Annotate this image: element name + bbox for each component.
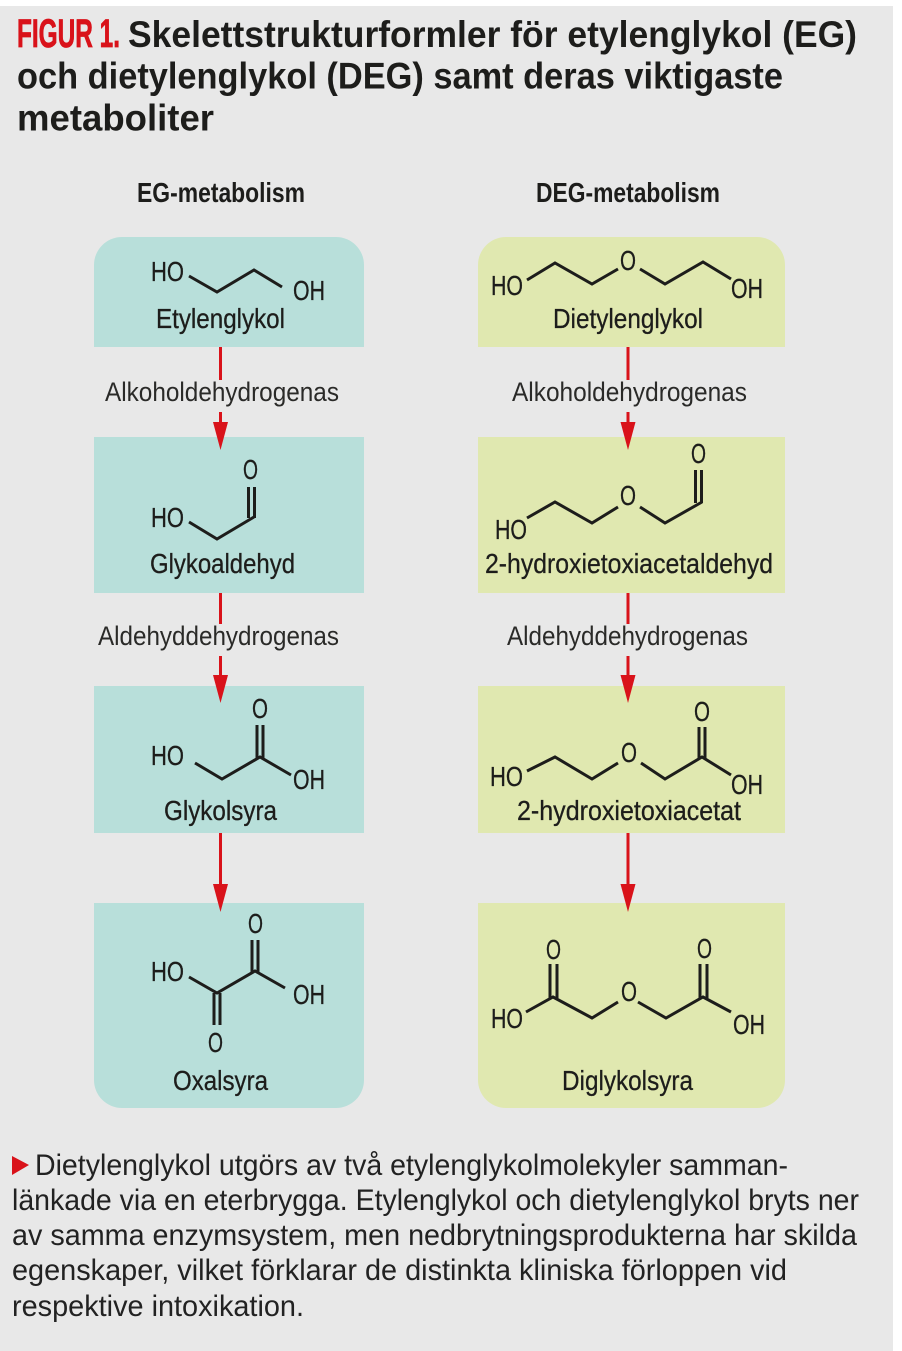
box: Glykoaldehyd: O <box>243 454 258 485</box>
box: Oxalsyra: OH <box>293 979 325 1010</box>
box: 2-hydroxietoxiacetaldehyd: 2-hydroxietoxiacetaldehyd <box>485 548 773 579</box>
box: Diglykolsyra: OH <box>733 1009 765 1040</box>
arrow: Alkoholdehydrogenas <box>105 347 339 450</box>
box: Glykolsyra <box>94 686 364 833</box>
box: 2-hydroxietoxiacetat: 2-hydroxietoxiacetat <box>517 795 741 826</box>
box: Oxalsyra: O <box>248 908 263 939</box>
box: Dietylenglykol <box>478 237 785 347</box>
arrow: Alkoholdehydrogenas <box>512 347 747 450</box>
arrow: Alkoholdehydrogenas: Alkoholdehydrogenas <box>105 377 339 407</box>
title <box>17 12 857 138</box>
box: 2-hydroxietoxiacetaldehyd: HO <box>495 514 527 545</box>
arrow: Alkoholdehydrogenas: Alkoholdehydrogenas <box>512 377 747 407</box>
box: Diglykolsyra <box>478 903 785 1108</box>
box: Diglykolsyra: O <box>546 934 561 965</box>
arrow: Aldehyddehydrogenas <box>507 593 748 703</box>
title: och dietylenglykol (DEG) samt deras viktigaste <box>17 56 783 96</box>
box: 2-hydroxietoxiacetaldehyd <box>478 437 785 593</box>
box: Oxalsyra <box>94 903 364 1108</box>
title: FIGUR 1. <box>17 12 120 56</box>
box: 2-hydroxietoxiacetat <box>478 686 785 833</box>
box: Diglykolsyra: HO <box>491 1003 523 1034</box>
caption: Dietylenglykol utgörs av två etylenglykolmolekyler samman- <box>35 1149 788 1182</box>
box: Etylenglykol <box>94 237 364 347</box>
arrow: Aldehyddehydrogenas <box>98 593 339 703</box>
box: Etylenglykol: HO <box>151 256 184 287</box>
box: Glykolsyra: HO <box>151 740 184 771</box>
box: 2-hydroxietoxiacetat: OH <box>731 769 763 800</box>
caption: länkade via en eterbrygga. Etylenglykol och dietylenglykol bryts ner <box>12 1184 859 1217</box>
column heading: EG-metabolism: EG-metabolism <box>137 177 305 208</box>
box: Glykolsyra: OH <box>293 764 325 795</box>
caption: egenskaper, vilket förklarar de distinkta kliniska förloppen vid <box>12 1254 787 1287</box>
box: 2-hydroxietoxiacetaldehyd: O <box>620 480 636 511</box>
arrow: Glykolsyra to Oxalsyra <box>213 833 228 912</box>
box: Dietylenglykol: HO <box>491 270 523 301</box>
box: Oxalsyra: Oxalsyra <box>173 1065 268 1096</box>
box: Dietylenglykol: OH <box>731 273 763 304</box>
box: Oxalsyra: HO <box>151 956 184 987</box>
arrow: Aldehyddehydrogenas: Aldehyddehydrogenas <box>507 621 748 651</box>
box: Dietylenglykol: Dietylenglykol <box>553 303 703 334</box>
box: Glykoaldehyd <box>94 437 364 593</box>
panel: DEG column <box>478 237 785 1108</box>
box: 2-hydroxietoxiacetaldehyd: O <box>691 438 706 469</box>
box: Etylenglykol: Etylenglykol <box>156 303 285 334</box>
caption: respektive intoxikation. <box>12 1290 304 1323</box>
icon: red triangle <box>12 1156 29 1175</box>
box: 2-hydroxietoxiacetat: HO <box>490 761 523 792</box>
box: Diglykolsyra: O <box>621 976 637 1007</box>
arrow: 2-hydroxietoxiacetat to Diglykolsyra <box>620 833 636 912</box>
caption <box>12 1149 859 1323</box>
box: Glykoaldehyd: HO <box>151 502 184 533</box>
box: Diglykolsyra: Diglykolsyra <box>562 1065 693 1096</box>
arrow: Aldehyddehydrogenas: Aldehyddehydrogenas <box>98 621 339 651</box>
title: Skelettstrukturformler för etylenglykol (EG) <box>128 14 857 55</box>
box: Glykoaldehyd: Glykoaldehyd <box>150 548 295 579</box>
column heading: DEG-metabolism: DEG-metabolism <box>536 177 720 208</box>
box: 2-hydroxietoxiacetat: O <box>621 737 637 768</box>
box: Oxalsyra: O <box>208 1027 223 1058</box>
box: Etylenglykol: OH <box>293 275 325 306</box>
box: 2-hydroxietoxiacetat: O <box>694 696 710 727</box>
box: Glykolsyra: O <box>252 693 268 724</box>
title: metaboliter <box>17 98 214 138</box>
panel: EG column <box>94 237 364 1108</box>
box: Diglykolsyra: O <box>697 933 712 964</box>
box: Glykolsyra: Glykolsyra <box>164 795 277 826</box>
caption: av samma enzymsystem, men nedbrytningsprodukterna har skilda <box>12 1219 858 1252</box>
box: Dietylenglykol: O <box>620 245 636 276</box>
